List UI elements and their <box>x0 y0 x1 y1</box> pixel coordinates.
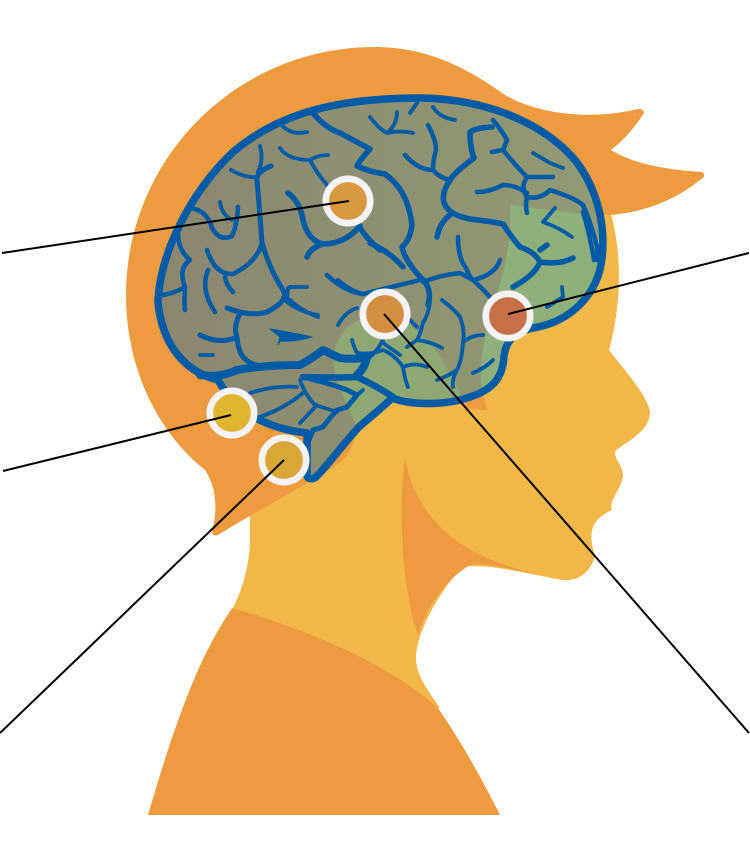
marker: front brain <box>486 294 530 338</box>
neck shadow <box>402 458 532 635</box>
marker: brain stem <box>262 438 306 482</box>
brain outline <box>158 98 603 479</box>
leader line: lower right <box>384 314 749 733</box>
shoulders <box>148 608 500 815</box>
marker: centre brain <box>363 292 407 336</box>
skin: face and neck <box>232 200 650 708</box>
brain <box>158 98 620 490</box>
marker: cerebellum <box>210 391 254 435</box>
leader line: middle left <box>3 415 231 471</box>
leader line: upper left <box>2 201 349 253</box>
sulci <box>163 103 597 445</box>
leader line: lower left <box>0 460 284 733</box>
hair <box>126 47 704 535</box>
small shadow under brain <box>464 382 487 410</box>
leader line: upper right <box>508 253 749 314</box>
translucent face overlay on brain <box>333 205 600 424</box>
brain tissue <box>158 98 603 479</box>
marker: upper brain <box>326 179 370 223</box>
